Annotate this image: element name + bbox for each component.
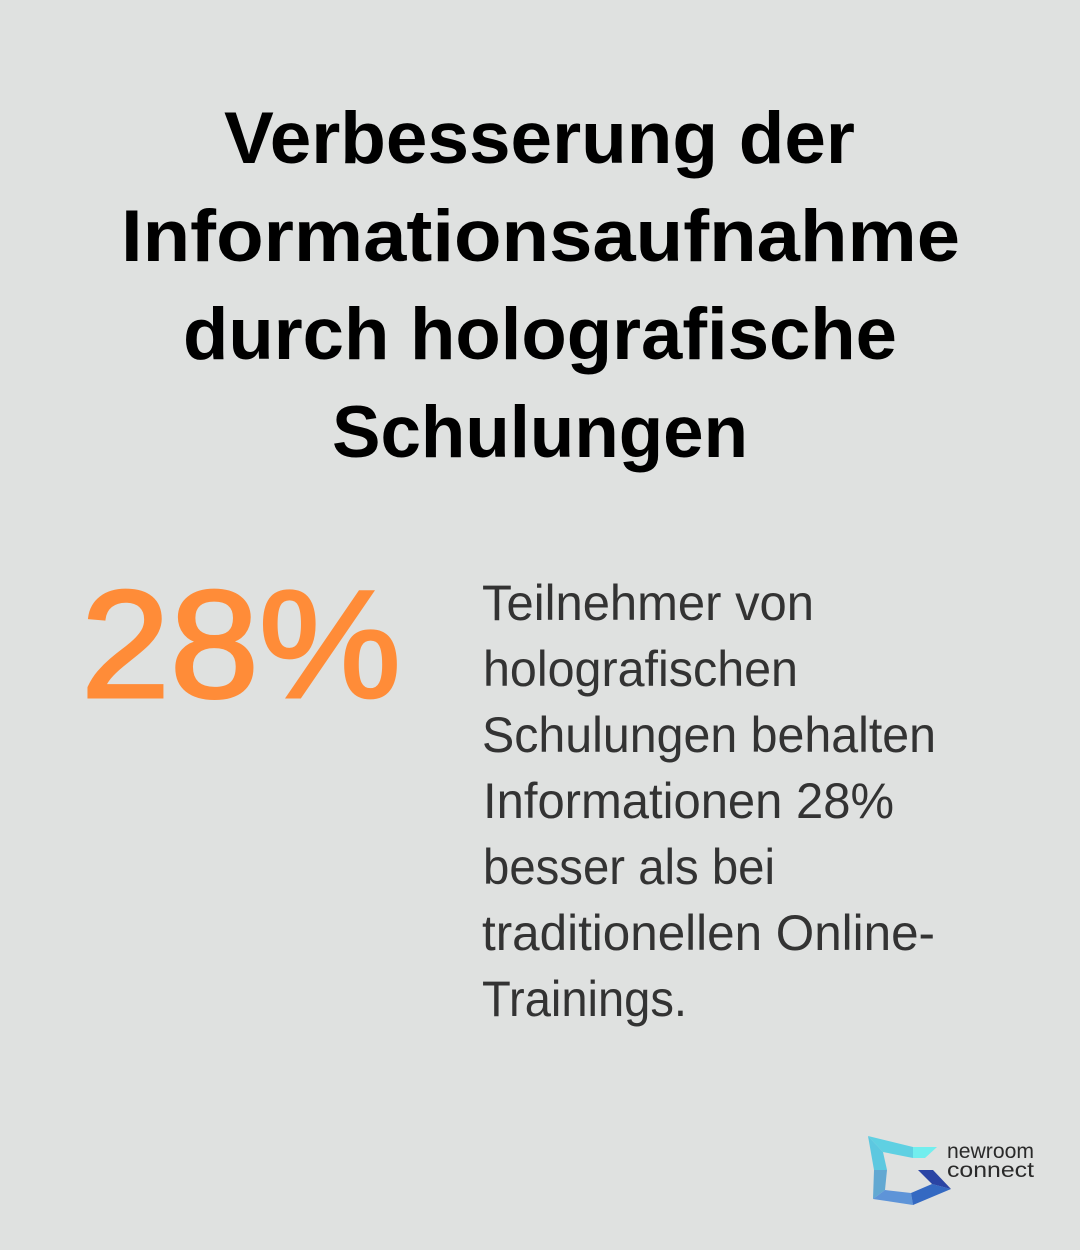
title: Informationsaufnahme — [121, 196, 960, 277]
description text: holografischen — [483, 641, 798, 697]
description text: besser als bei — [483, 839, 775, 895]
title: durch holografische — [183, 294, 897, 375]
description text: Teilnehmer von — [482, 575, 814, 631]
logo: newroom connect — [868, 1136, 1034, 1205]
description text: Informationen 28% — [483, 773, 894, 829]
description text: traditionellen Online- — [482, 905, 935, 961]
icon: logo mark — [868, 1136, 951, 1205]
logo wordmark — [947, 1140, 1034, 1182]
description text: Trainings. — [482, 971, 687, 1027]
title — [121, 98, 960, 473]
description text: Schulungen behalten — [482, 707, 936, 763]
logo wordmark: newroom — [947, 1140, 1034, 1163]
title: Verbesserung der — [224, 98, 855, 179]
big statistic: 28%: 28% — [81, 559, 401, 730]
description text — [482, 575, 936, 1027]
logo wordmark: connect — [947, 1159, 1034, 1182]
title: Schulungen — [332, 392, 748, 473]
